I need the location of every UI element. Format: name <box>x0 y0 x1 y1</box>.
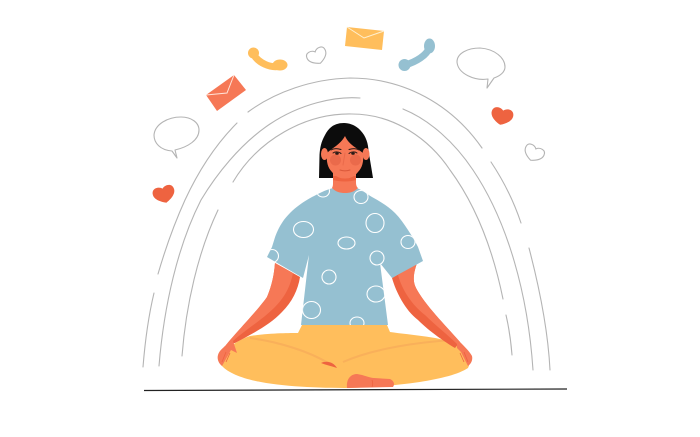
icon: blue phone <box>398 38 435 71</box>
icon: yellow envelope <box>345 27 384 50</box>
illustration: meditating woman under protective arcs <box>142 26 567 392</box>
ears <box>321 148 370 160</box>
icon: left orange heart <box>151 184 177 206</box>
icon: top outline heart <box>305 46 329 67</box>
shirt spots <box>266 185 415 329</box>
cheeks <box>330 154 361 166</box>
facial features <box>331 149 359 171</box>
icon: right orange heart <box>489 106 514 127</box>
icon: orange envelope <box>206 75 246 111</box>
icon: left speech bubble <box>154 117 199 158</box>
left arm <box>218 263 300 366</box>
icon: yellow phone <box>248 48 288 70</box>
neck <box>332 172 358 193</box>
face <box>327 136 363 178</box>
neck shadow <box>333 176 356 182</box>
legs <box>221 325 469 388</box>
hair <box>319 123 373 178</box>
protective arcs <box>143 78 550 370</box>
ground line <box>144 389 567 390</box>
right arm <box>392 263 472 366</box>
eyes <box>335 152 355 155</box>
shirt <box>266 185 423 329</box>
icon: right outline heart <box>522 143 546 164</box>
icon: right speech bubble <box>457 48 505 88</box>
foot <box>347 374 394 388</box>
figure: woman <box>218 123 472 388</box>
